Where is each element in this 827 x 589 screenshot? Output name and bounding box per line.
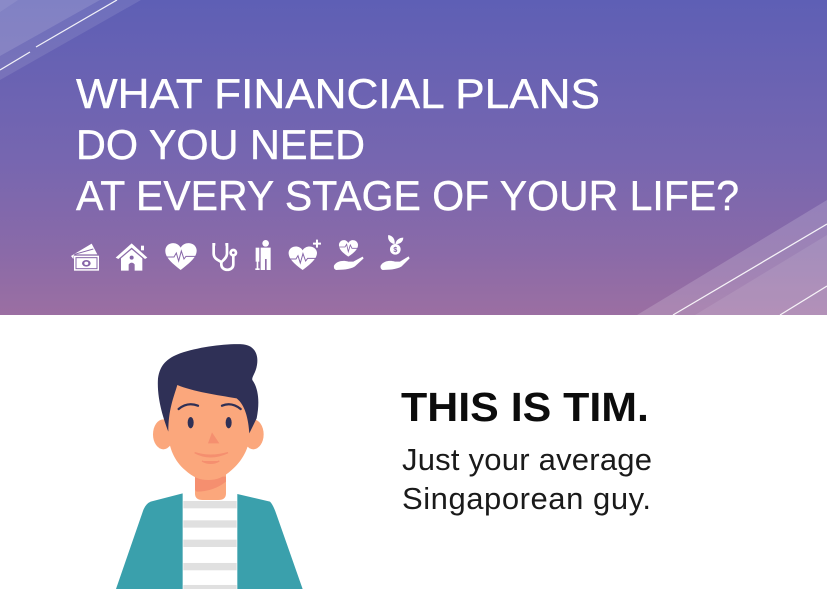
icon: heart with pulse <box>165 243 197 270</box>
mouth <box>195 453 228 463</box>
ears <box>153 419 264 449</box>
eyebrows <box>179 404 241 409</box>
title <box>76 70 739 219</box>
description: Singaporean guy. <box>402 481 651 516</box>
icon: patient <box>255 240 271 270</box>
icon row <box>71 235 410 271</box>
icon: hand holding plant and coin <box>381 235 410 270</box>
icon: hand holding heart <box>334 240 364 270</box>
shirt <box>183 492 237 589</box>
description: Just your average <box>402 442 652 477</box>
jacket <box>116 493 303 589</box>
icon: money <box>71 244 99 271</box>
description <box>402 442 652 516</box>
face <box>168 375 250 480</box>
icon: stethoscope <box>214 244 236 270</box>
nose <box>208 432 219 443</box>
icon: house <box>116 243 147 271</box>
title: WHAT FINANCIAL PLANS <box>76 70 600 117</box>
icon: hand holding plant and coin: $ <box>393 247 397 254</box>
character: Tim <box>116 344 303 589</box>
eyes <box>188 417 232 428</box>
heading: this is Tim: THIS IS TIM. <box>401 384 649 430</box>
title: DO YOU NEED <box>76 121 365 168</box>
title: AT EVERY STAGE OF YOUR LIFE? <box>76 172 739 219</box>
neck <box>195 468 226 500</box>
icon: heart with plus <box>289 240 321 270</box>
header banner <box>0 0 827 315</box>
hair <box>158 344 258 433</box>
